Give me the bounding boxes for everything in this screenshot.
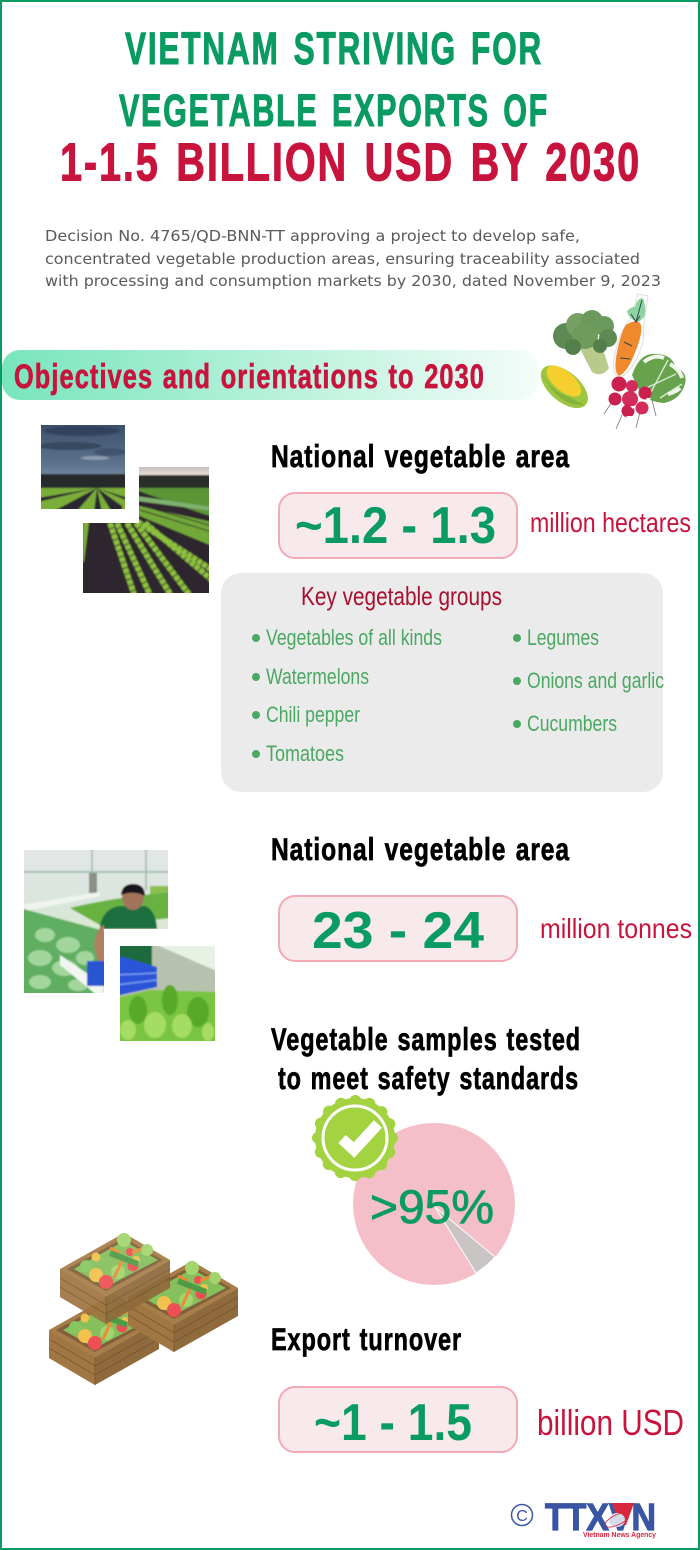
- icon: spinach: [632, 354, 686, 403]
- list: right column: Onions and garlic: [527, 668, 664, 693]
- icon: vegetable crates: [49, 1233, 238, 1385]
- logo: TTXVN: Vietnam News Agency: [583, 1530, 657, 1539]
- stat: vegetable area: ~1.2 - 1.3: [295, 497, 496, 555]
- intro text: concentrated vegetable production areas, ensuring traceability associated: [45, 250, 640, 268]
- heading: samples tested: Vegetable samples tested: [271, 1021, 581, 1057]
- heading: export turnover: Export turnover: [271, 1321, 462, 1357]
- photo: field 2: [80, 464, 212, 597]
- icon: carrot: [614, 294, 648, 378]
- photo: lettuce and crate: [120, 946, 215, 1041]
- logo: TTXVN: C: [516, 1508, 528, 1525]
- heading: national vegetable area: National vegetable area: [271, 438, 570, 474]
- pie chart: safety: >95%: [370, 1180, 494, 1233]
- intro text: [45, 227, 661, 290]
- section banner: [2, 350, 538, 400]
- panel heading: Key vegetable groups: [301, 581, 502, 611]
- stat: export turnover: [279, 1387, 517, 1452]
- stat: output: [279, 896, 517, 961]
- icon: corn: [533, 357, 595, 416]
- list: right column: [513, 625, 664, 736]
- photo: greenhouse worker: [20, 846, 172, 996]
- list: left column: Tomatoes: [266, 741, 344, 766]
- stat: output: 23 - 24: [312, 902, 484, 960]
- list: left column: Watermelons: [266, 664, 369, 689]
- list: left column: Vegetables of all kinds: [266, 625, 442, 650]
- icon: radishes: [604, 376, 656, 429]
- icon: vegetables: [533, 294, 686, 429]
- heading: national vegetable area (output): National vegetable area: [271, 831, 570, 867]
- intro text: with processing and consumption markets by 2030, dated November 9, 2023: [45, 272, 661, 290]
- pie chart: safety: [353, 1123, 515, 1285]
- icon: check badge: [315, 1098, 395, 1178]
- panel: key vegetable groups: [221, 573, 664, 792]
- heading: samples tested: to meet safety standards: [278, 1060, 579, 1096]
- photo: field 1: [41, 425, 125, 509]
- section banner: Objectives and orientations to 2030: [14, 358, 485, 396]
- title: [60, 23, 641, 192]
- list: right column: Legumes: [527, 625, 599, 650]
- stat: export turnover: ~1 - 1.5: [314, 1394, 472, 1452]
- list: left column: Chili pepper: [266, 702, 360, 727]
- heading: samples tested: [271, 1021, 581, 1096]
- intro text: Decision No. 4765/QD-BNN-TT approving a project to develop safe,: [45, 227, 580, 245]
- logo: TTXVN: TTXVN: [545, 1497, 656, 1539]
- list: right column: Cucumbers: [527, 711, 617, 736]
- icon: broccoli: [553, 310, 617, 374]
- list: left column: [252, 625, 442, 766]
